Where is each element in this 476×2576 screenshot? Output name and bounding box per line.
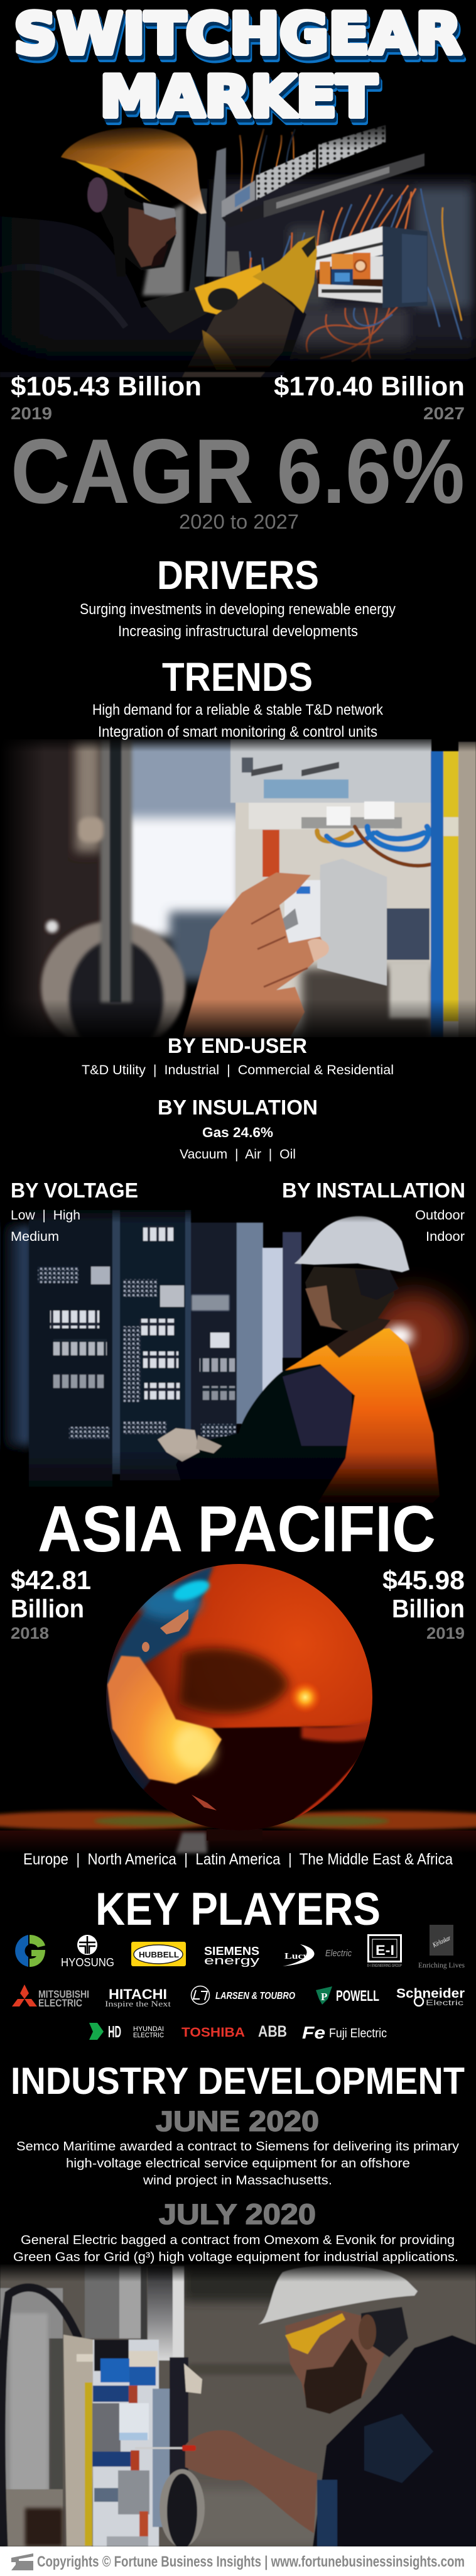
logo: Mitsubishi Electric: MITSUBISHI xyxy=(38,1988,89,2000)
logo: Powell: P xyxy=(321,1991,327,2003)
logo: Fuji Electric: Fe xyxy=(302,2023,325,2042)
logo: Schneider Electric xyxy=(396,1986,465,2007)
drivers: Increasing infrastructural developments xyxy=(118,623,358,640)
stat: 2019 market value: 2019 xyxy=(11,404,52,423)
footer xyxy=(0,2546,476,2576)
stat: 2019 market value: $105.43 Billion xyxy=(11,372,202,402)
drivers: Surging investments in developing renewable energy xyxy=(80,601,396,618)
stat: 2027 market value: $170.40 Billion xyxy=(274,372,465,402)
region: Asia Pacific heading and values: Billion xyxy=(11,1594,84,1623)
logo: Lucy Electric: Lucy xyxy=(284,1952,308,1961)
segment: by installation: BY INSTALLATION xyxy=(282,1179,465,1202)
logo: Schneider Electric: Electric xyxy=(426,1998,463,2007)
segment: by installation: Outdoor xyxy=(415,1208,465,1223)
panel: breaker rows xyxy=(222,125,425,228)
logo: Kirloskar xyxy=(418,1925,465,1969)
development: June 2020: high-voltage electrical service equipment for an offshore xyxy=(66,2157,410,2171)
drivers xyxy=(80,553,396,640)
segment: by installation xyxy=(282,1179,465,1244)
logo: Hyundai Electric: HYUNDAI xyxy=(133,2025,164,2033)
trends: TRENDS xyxy=(162,654,313,700)
logo: Lucy Electric: Electric xyxy=(325,1948,352,1959)
logo: Hitachi xyxy=(105,1986,171,2008)
segment: by insulation: Vacuum | Air | Oil xyxy=(180,1147,296,1162)
fade overlays xyxy=(0,119,476,372)
region: Asia Pacific heading and values: Billion xyxy=(392,1594,465,1623)
segment: by end-user: T&D Utility | Industrial | Commercial & Residential xyxy=(82,1063,394,1077)
logo: Siemens Energy: SIEMENS xyxy=(204,1945,259,1957)
development: June 2020: Semco Maritime awarded a contract to Siemens for delivering its primary xyxy=(16,2140,459,2154)
logo: Hyundai Electric xyxy=(89,2022,164,2041)
segment: by voltage xyxy=(11,1179,138,1244)
drivers: DRIVERS xyxy=(157,553,319,598)
logo: Schneider Electric: Schneider xyxy=(396,1986,465,2001)
photo: worker in orange vest at switchgear cabinets xyxy=(0,1204,476,1521)
stat: 2027 market value: 2027 xyxy=(423,404,465,423)
region: Asia Pacific heading and values: ASIA PACIFIC xyxy=(38,1493,436,1566)
region: Asia Pacific heading and values: $42.81 xyxy=(11,1565,91,1595)
logo: Powell xyxy=(316,1986,379,2005)
title: MARKET xyxy=(100,64,377,130)
segment: by insulation xyxy=(158,1096,318,1162)
logo: E-I Engineering Group xyxy=(367,1935,402,1968)
segment: by voltage: BY VOLTAGE xyxy=(11,1179,138,1202)
logo: Siemens Energy xyxy=(204,1945,259,1967)
globe xyxy=(106,1564,377,1836)
logo: Mitsubishi Electric xyxy=(12,1984,89,2009)
trends: High demand for a reliable & stable T&D network xyxy=(92,702,384,718)
stat: 2027 market value xyxy=(274,372,465,423)
logo: Hitachi: Inspire the Next xyxy=(105,1999,171,2008)
segment: by end-user xyxy=(82,1034,394,1077)
icon: Fortune Business Insights logo xyxy=(11,2553,33,2570)
logo: ABB: ABB xyxy=(258,2023,287,2040)
horizon glow under globe xyxy=(0,1811,476,1853)
logo: Kirloskar: Kirloskar xyxy=(431,1934,452,1949)
breaker module with orange relays xyxy=(310,226,428,308)
segment: by voltage: Medium xyxy=(11,1230,59,1244)
logo: Siemens Energy: energy xyxy=(204,1954,259,1967)
logo: E-I Engineering Group: E-I ENGINEERING GROUP xyxy=(367,1964,402,1968)
segment: by end-user: BY END-USER xyxy=(168,1034,307,1057)
region: Asia Pacific heading and values xyxy=(11,1493,465,1643)
title xyxy=(14,1,462,130)
photo: hand fitting circuit breaker xyxy=(0,735,476,1059)
worker: jacket and arms xyxy=(0,216,317,377)
logo: Mitsubishi Electric: ELECTRIC xyxy=(38,1997,82,2009)
logo: Lucy Electric xyxy=(283,1944,352,1966)
logo: Kirloskar: Enriching Lives xyxy=(418,1961,465,1969)
logo: E-I Engineering Group: E-I xyxy=(376,1942,394,1958)
hero photo: electrician in orange helmet at panel xyxy=(0,119,476,377)
logo: Fuji Electric: Fuji Electric xyxy=(329,2027,387,2040)
trends: Integration of smart monitoring & control units xyxy=(98,724,377,740)
logo: Toshiba: TOSHIBA xyxy=(181,2025,245,2040)
segment: by installation: Indoor xyxy=(426,1230,465,1244)
logo: Fuji Electric xyxy=(302,2023,387,2042)
logo: Hyundai Electric: HD xyxy=(108,2022,121,2041)
logo: Larsen & Toubro: LARSEN & TOUBRO xyxy=(215,1991,295,2001)
photo: bearded electrician with screwdriver xyxy=(0,2263,476,2549)
logo: Hyosung: HYOSUNG xyxy=(61,1956,114,1969)
key players heading: KEY PLAYERS xyxy=(95,1884,381,1935)
region: Asia Pacific heading and values: 2018 xyxy=(11,1624,49,1643)
trends xyxy=(92,654,384,740)
region: Asia Pacific heading and values: 2019 xyxy=(426,1624,465,1643)
segment: by insulation: BY INSULATION xyxy=(158,1096,318,1119)
logo: Hubbell xyxy=(131,1942,186,1966)
logo: Larsen & Toubro xyxy=(191,1986,295,2004)
logo: Powell: POWELL xyxy=(336,1988,379,2005)
development: June 2020: JUNE 2020 xyxy=(156,2105,319,2137)
logo: Hubbell: HUBBELL xyxy=(139,1950,179,1959)
logo: Hyosung xyxy=(61,1935,114,1969)
development: June 2020: wind project in Massachusetts. xyxy=(143,2174,332,2188)
logo: Hyundai Electric: ELECTRIC xyxy=(133,2032,164,2039)
CAGR headline: 2020 to 2027 xyxy=(179,510,299,533)
segment: by insulation: Gas 24.6% xyxy=(202,1125,273,1140)
development: June 2020 xyxy=(16,2105,459,2188)
title: SWITCHGEAR xyxy=(14,1,462,67)
development: July 2020: Green Gas for Grid (g³) high voltage equipment for industrial applications. xyxy=(13,2250,458,2264)
logo: CG xyxy=(15,1935,45,1967)
development: July 2020: General Electric bagged a contract from Omexom & Evonik for providing xyxy=(21,2233,455,2247)
region: Asia Pacific heading and values: $45.98 xyxy=(382,1565,465,1595)
segment: by voltage: Low | High xyxy=(11,1208,80,1223)
development: July 2020 xyxy=(13,2198,458,2264)
development: July 2020: JULY 2020 xyxy=(159,2198,316,2230)
worker: head, helmet and goggles xyxy=(61,128,207,277)
stat: 2019 market value xyxy=(11,372,202,423)
logo: Hitachi: HITACHI xyxy=(109,1986,167,2002)
